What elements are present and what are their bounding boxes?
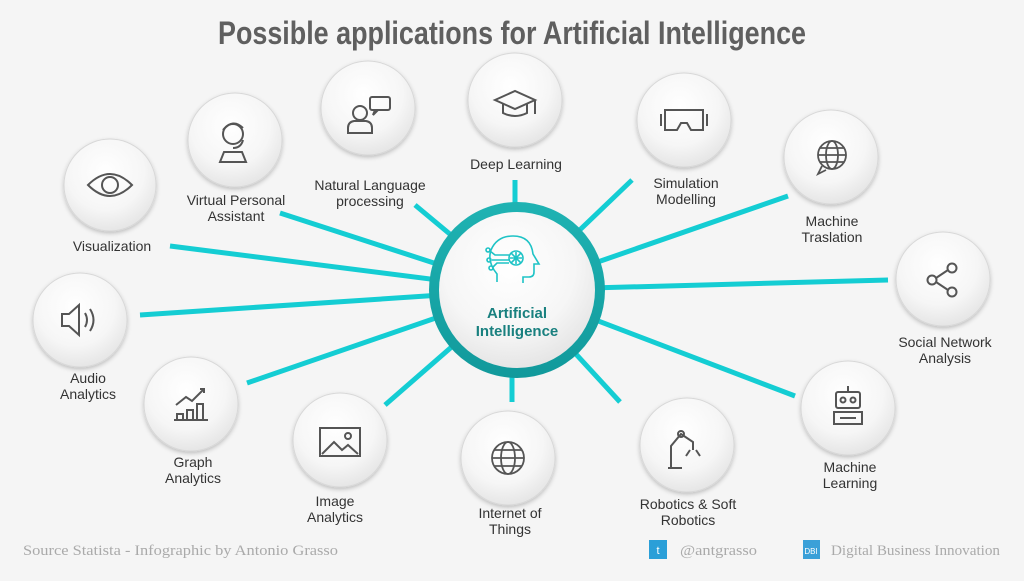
node: Natural Language processing: processing bbox=[336, 193, 404, 209]
node: Visualization bbox=[64, 139, 156, 254]
connector lines bbox=[140, 180, 888, 405]
node: Audio Analytics: Audio bbox=[70, 370, 106, 386]
footer: DBI: Digital Business Innovation bbox=[831, 543, 1000, 559]
node: Social Network Analysis: Analysis bbox=[919, 350, 971, 366]
node: Robotics & Soft Robotics: Robotics & Soft bbox=[640, 496, 736, 512]
node: Machine Traslation: Traslation bbox=[802, 229, 862, 245]
node: Natural Language processing: Natural Language bbox=[314, 177, 426, 193]
icon: AI head bbox=[486, 236, 539, 283]
node: Natural Language processing bbox=[314, 61, 426, 209]
node: Internet of Things: Internet of bbox=[478, 505, 542, 521]
node: Visualization: Visualization bbox=[73, 238, 151, 254]
node: Machine Learning: Machine bbox=[824, 459, 877, 475]
node: Robotics & Soft Robotics: Robotics bbox=[661, 512, 715, 528]
node: Audio Analytics bbox=[33, 273, 127, 402]
node: Simulation Modelling: Simulation bbox=[653, 175, 719, 191]
node: Simulation Modelling: Modelling bbox=[656, 191, 716, 207]
node: Machine Learning: Learning bbox=[823, 475, 877, 491]
footer: twitter bbox=[649, 540, 757, 559]
hub label: Artificial bbox=[487, 305, 547, 322]
footer: twitter: t bbox=[656, 545, 660, 557]
node: Social Network Analysis: Social Network bbox=[898, 334, 993, 350]
node: Machine Learning bbox=[801, 361, 895, 491]
footer: DBI: DBI bbox=[804, 547, 818, 556]
node: Robotics & Soft Robotics bbox=[640, 398, 736, 528]
node: Image Analytics: Analytics bbox=[307, 509, 363, 525]
node: Audio Analytics: Analytics bbox=[60, 386, 116, 402]
node: Image Analytics bbox=[293, 393, 387, 525]
node: Deep Learning bbox=[468, 53, 562, 172]
node: Virtual Personal Assistant: Assistant bbox=[208, 208, 265, 224]
node: Virtual Personal Assistant bbox=[187, 93, 285, 224]
node: Simulation Modelling bbox=[637, 73, 731, 207]
node: Deep Learning: Deep Learning bbox=[470, 156, 562, 172]
node: Graph Analytics: Analytics bbox=[165, 470, 221, 486]
node: Machine Traslation bbox=[784, 110, 878, 245]
node: Virtual Personal Assistant: Virtual Personal bbox=[187, 192, 285, 208]
node: Internet of Things bbox=[461, 411, 555, 537]
central hub: Artificial Intelligence: Intelligence bbox=[476, 323, 558, 340]
node: Image Analytics: Image bbox=[316, 493, 355, 509]
node: Graph Analytics bbox=[144, 357, 238, 486]
node: Internet of Things: Things bbox=[489, 521, 531, 537]
title: Possible applications for Artificial Intelligence bbox=[218, 15, 806, 51]
node: Social Network Analysis bbox=[896, 232, 993, 366]
node: Machine Traslation: Machine bbox=[806, 213, 859, 229]
node: Graph Analytics: Graph bbox=[174, 454, 212, 470]
footer: source: Source Statista - Infographic by Antonio Grasso bbox=[23, 543, 338, 559]
central hub: Artificial Intelligence bbox=[429, 202, 605, 378]
footer: twitter: @antgrasso bbox=[680, 543, 757, 559]
